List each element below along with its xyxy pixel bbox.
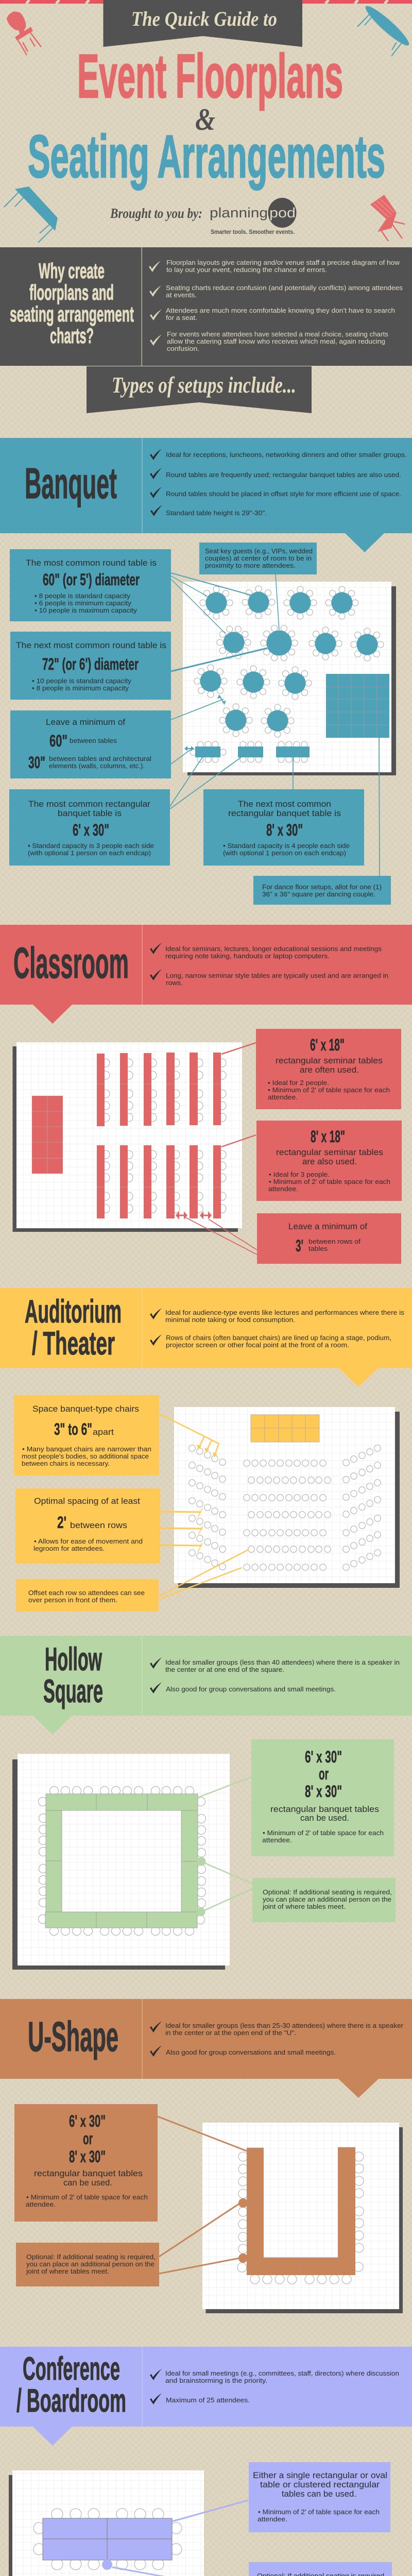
- u-shape facts: [150, 2021, 403, 2057]
- callout: dance floor: For dance floor setups, allot for one (1): [262, 884, 382, 891]
- callout: chair spacing: apart: [93, 1428, 114, 1437]
- heading: why create: floorplans and: [29, 280, 114, 304]
- callout: offset rows: over person in front of them.: [28, 1597, 117, 1604]
- heading: u-shape: U-Shape: [28, 2013, 118, 2060]
- callout: row spacing: between rows of: [308, 1238, 361, 1245]
- callout: 60 inch round table: 60" (or 5') diameter: [43, 570, 140, 589]
- callout: 6 foot rectangular table: (with optional 1 person on each endcap): [28, 850, 151, 857]
- callout: chair spacing: 3" to 6": [54, 1420, 92, 1438]
- hollow square facts: [150, 1657, 400, 1693]
- panel: u-shape header: [0, 1999, 412, 2098]
- callout: 72 inch round table: • 10 people is standard capacity: [32, 677, 132, 685]
- top stripe: [0, 0, 412, 4]
- callout: 6 foot rectangular table: banquet table is: [58, 809, 122, 818]
- callout: key guests: Seat key guests (e.g., VIPs, wedded: [205, 548, 313, 555]
- panel: banquet header: [0, 438, 412, 552]
- heading: conference / boardroom: / Boardroom: [16, 2383, 126, 2419]
- callout: dance floor: 36" x 36" square per dancing couple.: [262, 891, 375, 898]
- callout: optional seating: you can place an additional person on the: [263, 1896, 391, 1903]
- leader lines: u-shape: [158, 2116, 247, 2274]
- callout: chair spacing: most people's bodies, so additional space: [22, 1453, 149, 1460]
- reasons list: Floorplan layouts give catering and/or venue staff a precise diagram of how: [166, 259, 400, 266]
- u-shape facts: in the center or at the open end of the "U".: [165, 2029, 296, 2037]
- floorplan: auditorium: [174, 1407, 400, 1588]
- callout: table sizes: [14, 2104, 158, 2222]
- callout: table sizes: 6' x 30": [69, 2112, 106, 2130]
- callout: optional seating: Optional: If additional seating is required,: [26, 2253, 156, 2261]
- reasons list: Seating charts reduce confusion (and potentially conflicts) among attendees: [166, 284, 403, 292]
- callout: 8 foot rectangular table: [203, 789, 364, 866]
- reasons list: for a seat.: [166, 314, 197, 321]
- callout: 8 x 18 seminar tables: [256, 1121, 402, 1201]
- callout: table sizes: 8' x 30": [69, 2147, 106, 2166]
- panel: conference header: [0, 2347, 412, 2446]
- callout: 6 foot rectangular table: 6' x 30": [73, 821, 109, 839]
- panel: why create floorplans: [0, 247, 412, 366]
- leader lines: classroom: [176, 1043, 257, 1255]
- callout: offset rows: Offset each row so attendees can see: [28, 1589, 145, 1597]
- heading: auditorium / theater: / Theater: [32, 1326, 115, 1362]
- callout: 60 inch round table: • 10 people is maximum capacity: [35, 607, 138, 614]
- section: conference / boardroom: [0, 2347, 412, 2576]
- callout: 8 x 18 seminar tables: attendee.: [268, 1185, 298, 1193]
- callout: row spacing: legroom for attendees.: [33, 1545, 105, 1552]
- leader lines: banquet: [170, 573, 380, 876]
- callout: table sizes: or: [83, 2129, 93, 2148]
- section: classroom: [0, 925, 412, 1264]
- logo: planningpod: [210, 198, 297, 235]
- callout: 6 foot rectangular table: • Standard capacity is 3 people each side: [28, 842, 154, 850]
- callout: 6 x 18 seminar tables: 6' x 18": [310, 1036, 345, 1054]
- banquet facts: Ideal for receptions, luncheons, networking dinners and other smaller groups.: [166, 451, 407, 459]
- section: hollow square: [0, 1636, 412, 1970]
- callout: table sizes: • Minimum of 2' of table space for each: [263, 1829, 384, 1837]
- reasons list: For events where attendees have selected a meal choice, seating charts: [167, 331, 388, 338]
- callout: table types: Either a single rectangular or oval: [253, 2471, 387, 2480]
- classroom facts: [150, 943, 388, 987]
- callout: table sizes: can be used.: [300, 1814, 349, 1823]
- section: u-shape: [0, 1999, 412, 2313]
- callout: row spacing: 3': [296, 1236, 303, 1255]
- callout: table spacing: 60": [49, 732, 67, 750]
- callout: 6 x 18 seminar tables: rectangular seminar tables: [276, 1056, 383, 1065]
- callout: chair spacing: [14, 1395, 159, 1476]
- callout: 60 inch round table: [10, 549, 171, 621]
- heading: hollow square: Hollow: [45, 1641, 102, 1677]
- callout: optional seating: you can place an additional person on the: [26, 2261, 154, 2268]
- callout: table types: attendee.: [258, 2516, 287, 2523]
- panel: auditorium header: [0, 1288, 412, 1387]
- callout: 6 x 18 seminar tables: • Ideal for 2 people.: [268, 1079, 329, 1087]
- callout: 72 inch round table: [10, 632, 171, 700]
- logo: planningpod: planning: [210, 205, 268, 221]
- leader lines: hollow square: [198, 1777, 252, 1910]
- logo: planningpod: Smarter tools. Smoother events.: [211, 229, 295, 235]
- callout: table types: tables can be used.: [282, 2489, 356, 2499]
- icon: teal rectangular table bottom left: [4, 187, 58, 243]
- callout: table spacing: Leave a minimum of: [46, 718, 125, 727]
- logo: planningpod: pod: [269, 205, 296, 221]
- callout: 6 foot rectangular table: [9, 789, 170, 866]
- heading: hollow square: Square: [43, 1673, 103, 1709]
- heading: why create: seating arrangement: [10, 302, 134, 326]
- icon: teal oval table top right: [357, 2, 412, 56]
- callout: optional seating: joint of where tables meet.: [262, 1903, 346, 1910]
- callout: table sizes: [251, 1739, 394, 1856]
- floorplan: classroom: [12, 1042, 242, 1232]
- callout: table sizes: rectangular banquet tables: [34, 2169, 143, 2178]
- callout: 72 inch round table: 72" (or 6') diameter: [42, 655, 139, 673]
- callout: table spacing: [10, 710, 171, 778]
- hollow square facts: the center or at one end of the square.: [165, 1666, 284, 1673]
- callout: dance floor: [253, 876, 391, 905]
- callout: optional seating: [249, 2562, 392, 2576]
- banquet facts: Round tables are frequently used; rectangular banquet tables are also used.: [166, 471, 401, 479]
- callout: optional seating: [252, 1878, 396, 1922]
- callout: row spacing: [15, 1488, 160, 1564]
- banner: types of setups: [87, 366, 312, 413]
- callout: offset rows: [16, 1579, 159, 1612]
- header section: [0, 0, 412, 243]
- callout: 8 x 18 seminar tables: • Ideal for 3 people.: [269, 1171, 330, 1178]
- leader lines: conference: [112, 2500, 249, 2576]
- callout: table types: [249, 2462, 390, 2532]
- banquet facts: Standard table height is 29"-30".: [166, 510, 267, 517]
- banquet facts: Round tables should be placed in offset style for more efficient use of space.: [166, 490, 401, 498]
- callout: row spacing: Leave a minimum of: [288, 1222, 367, 1231]
- callout: optional seating: Optional: If additional seating is required,: [263, 1889, 392, 1896]
- heading: conference / boardroom: Conference: [23, 2351, 120, 2387]
- callout: 72 inch round table: The next most common round table is: [16, 641, 166, 650]
- conference facts: [150, 2369, 399, 2404]
- callout: key guests: proximity to more attendees.: [205, 562, 296, 569]
- reasons list: allow the catering staff know who receives which meal, again reducing: [167, 338, 385, 345]
- callout: 8 x 18 seminar tables: 8' x 18": [311, 1127, 345, 1146]
- callout: table spacing: between tables and architectural: [49, 755, 151, 762]
- callout: 6 x 18 seminar tables: • Minimum of 2' of table space for each: [268, 1087, 390, 1094]
- conference facts: Maximum of 25 attendees.: [166, 2397, 250, 2404]
- floorplan: conference: [9, 2470, 204, 2576]
- callout: table spacing: between tables: [70, 737, 117, 744]
- callout: 8 x 18 seminar tables: • Minimum of 2' of table space for each: [269, 1178, 390, 1185]
- heading: conference / boardroom: [16, 2351, 126, 2419]
- callout: 6 x 18 seminar tables: are often used.: [300, 1065, 359, 1075]
- heading: auditorium / theater: [25, 1294, 122, 1362]
- callout: key guests: couples) at center of room to be in: [205, 555, 312, 562]
- banquet facts: [150, 449, 407, 517]
- section: banquet: [0, 438, 412, 905]
- callout: 6 x 18 seminar tables: attendee.: [268, 1094, 298, 1101]
- floorplan: u-shape: [202, 2123, 403, 2313]
- heading: auditorium / theater: Auditorium: [25, 1294, 122, 1330]
- reasons list: to lay out your event, reducing the chance of errors.: [166, 266, 327, 274]
- callout: table sizes: • Minimum of 2' of table space for each: [26, 2194, 148, 2201]
- floorplan: hollow square: [12, 1754, 230, 1970]
- floorplan: banquet: [183, 582, 396, 775]
- panel: classroom header: [0, 925, 412, 1024]
- callout: optional seating: joint of where tables meet.: [26, 2268, 109, 2275]
- callout: table sizes: attendee.: [26, 2201, 56, 2208]
- auditorium facts: [150, 1308, 404, 1349]
- auditorium facts: Rows of chairs (often banquet chairs) are lined up facing a stage, podium,: [166, 1334, 391, 1342]
- reasons list: at events.: [166, 292, 197, 299]
- u-shape facts: Ideal for smaller groups (less than 25-30 attendees) where there is a speaker: [165, 2022, 403, 2029]
- callout: row spacing: 2': [57, 1513, 66, 1532]
- callout: table spacing: elements (walls, columns, etc.).: [49, 762, 145, 770]
- callout: chair spacing: • Many banquet chairs are narrower than: [22, 1446, 151, 1453]
- title: ampersand: &: [195, 103, 215, 137]
- auditorium facts: projector screen or other focal point at the front of a room.: [166, 1342, 349, 1349]
- brought to you by: Brought to you by:: [110, 206, 202, 221]
- auditorium facts: minimal note taking or food consumption.: [165, 1316, 295, 1324]
- reasons list: [149, 259, 403, 352]
- u-shape facts: Also good for group conversations and small meetings.: [166, 2049, 336, 2056]
- heading: why create: Why create: [39, 259, 105, 283]
- callout: table sizes: 8' x 30": [305, 1782, 342, 1801]
- callout: 60 inch round table: • 6 people is minimum capacity: [35, 600, 132, 607]
- callout: chair spacing: Space banquet-type chairs: [32, 1404, 139, 1414]
- classroom facts: Long, narrow seminar style tables are typically used and are arranged in: [166, 972, 388, 979]
- callout: table types: • Minimum of 2' of table space for each: [258, 2509, 380, 2516]
- callout: row spacing: Optimal spacing of at least: [34, 1497, 140, 1506]
- reasons list: Attendees are much more comfortable knowing they don't have to search: [166, 307, 395, 314]
- heading: why create: [10, 259, 134, 348]
- callout: table sizes: can be used.: [63, 2178, 112, 2188]
- callout: row spacing: tables: [308, 1245, 328, 1252]
- callout: 8 x 18 seminar tables: rectangular seminar tables: [276, 1148, 383, 1157]
- callout: 6 foot rectangular table: The most common rectangular: [28, 800, 151, 809]
- panel: hollow square header: [0, 1636, 412, 1735]
- callout: table spacing: 30": [28, 753, 45, 772]
- callout: table sizes: or: [319, 1765, 329, 1783]
- heading: classroom: Classroom: [13, 939, 129, 987]
- hollow square facts: Also good for group conversations and small meetings.: [166, 1686, 336, 1693]
- callout: 8 foot rectangular table: 8' x 30": [266, 821, 303, 839]
- callout: chair spacing: between chairs is necessary.: [22, 1460, 110, 1467]
- reasons list: confusion.: [167, 345, 199, 352]
- icon: red chair bottom right: [370, 195, 405, 241]
- callout: 8 foot rectangular table: The next most common: [238, 800, 331, 809]
- leader lines: auditorium: [159, 1414, 248, 1599]
- callout: 72 inch round table: • 8 people is minimum capacity: [32, 685, 129, 692]
- section: auditorium / theater: [0, 1288, 412, 1612]
- classroom facts: rows.: [166, 979, 183, 987]
- conference facts: Ideal for small meetings (e.g., committees, staff, directors) where discussion: [165, 2370, 399, 2377]
- callout: row spacing: • Allows for ease of movement and: [34, 1538, 143, 1545]
- callout: table sizes: rectangular banquet tables: [270, 1805, 379, 1814]
- callout: table types: table or clustered rectangular: [260, 2480, 380, 2489]
- classroom facts: requiring note taking, handouts or laptop computers.: [165, 953, 330, 960]
- callout: 8 x 18 seminar tables: are also used.: [302, 1157, 357, 1166]
- callout: row spacing: between rows: [70, 1521, 127, 1530]
- hollow square facts: Ideal for smaller groups (less than 40 attendees) where there is a speaker in: [165, 1659, 400, 1666]
- conference facts: and brainstorming is the priority.: [165, 2377, 267, 2384]
- heading: banquet: Banquet: [25, 459, 117, 507]
- icon: red chair top left: [7, 11, 41, 55]
- callout: optional seating: [16, 2243, 159, 2286]
- callout: key guests: [199, 543, 317, 574]
- heading: why create: charts?: [50, 324, 94, 348]
- callout: row spacing: [257, 1213, 401, 1264]
- callout: 60 inch round table: • 8 people is standard capacity: [35, 592, 131, 600]
- banner: the quick guide to: [103, 0, 302, 47]
- banner: the quick guide to: The Quick Guide to: [131, 7, 277, 30]
- heading: hollow square: [43, 1641, 103, 1709]
- callout: table sizes: 6' x 30": [305, 1748, 342, 1766]
- callout: 6 x 18 seminar tables: [256, 1029, 401, 1109]
- callout: 8 foot rectangular table: rectangular banquet table is: [228, 809, 341, 818]
- banner: types of setups: Types of setups include...: [112, 372, 296, 398]
- auditorium facts: Ideal for audience-type events like lectures and performances where there is: [165, 1309, 404, 1316]
- callout: table sizes: attendee.: [262, 1837, 292, 1844]
- callout: 8 foot rectangular table: • Standard capacity is 4 people each side: [223, 842, 350, 850]
- classroom facts: Ideal for seminars, lectures, longer educational sessions and meetings: [165, 945, 382, 953]
- callout: 60 inch round table: The most common round table is: [26, 558, 157, 568]
- callout: 8 foot rectangular table: (with optional 1 person on each endcap): [223, 850, 346, 857]
